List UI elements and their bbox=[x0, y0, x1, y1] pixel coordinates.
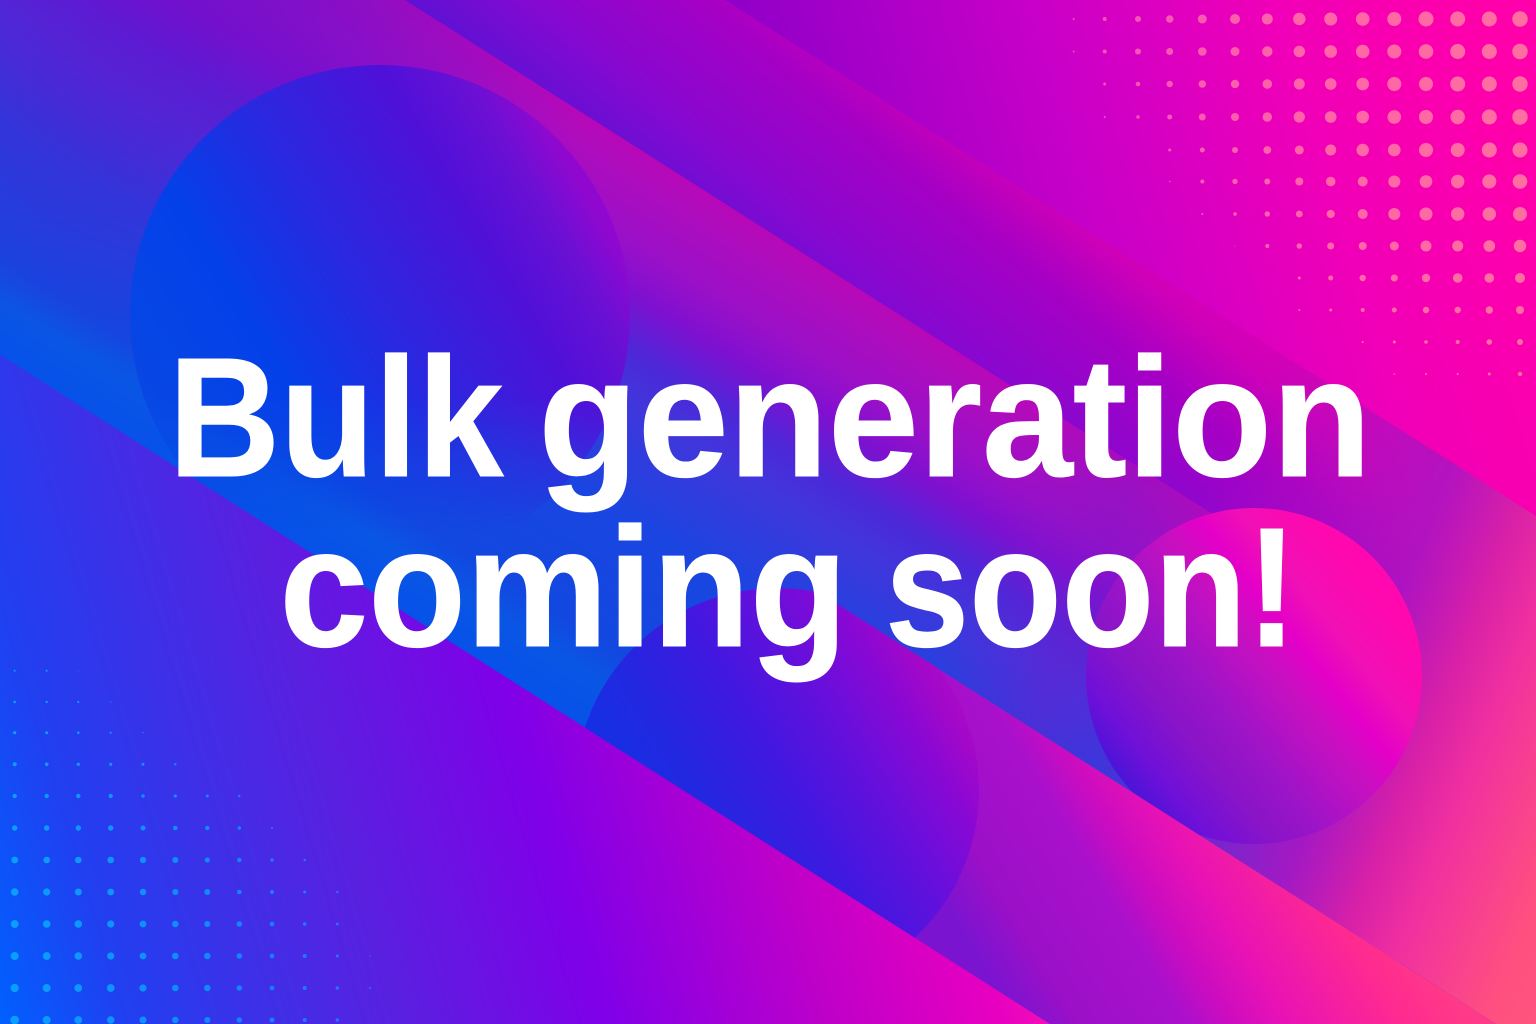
diagonal band: bottom left bbox=[0, 355, 1050, 1024]
title: Bulk generation coming soon!: generation bbox=[538, 323, 1371, 513]
dot pattern: bottom left halftone bbox=[10, 670, 371, 1024]
diagonal band: upper violet bbox=[405, 0, 1536, 720]
title: Bulk generation coming soon!: coming bbox=[280, 493, 848, 683]
title: Bulk generation coming soon! bbox=[168, 323, 1371, 683]
circle: lower centre bbox=[585, 588, 978, 938]
circle: large upper left bbox=[130, 65, 630, 502]
circle: right pink bbox=[1086, 508, 1422, 844]
title: Bulk generation coming soon!: Bulk bbox=[168, 323, 504, 513]
diagonal band: lower magenta bbox=[800, 603, 1496, 1024]
title: Bulk generation coming soon!: soon! bbox=[885, 493, 1297, 683]
dot pattern: top right halftone bbox=[1073, 11, 1528, 376]
